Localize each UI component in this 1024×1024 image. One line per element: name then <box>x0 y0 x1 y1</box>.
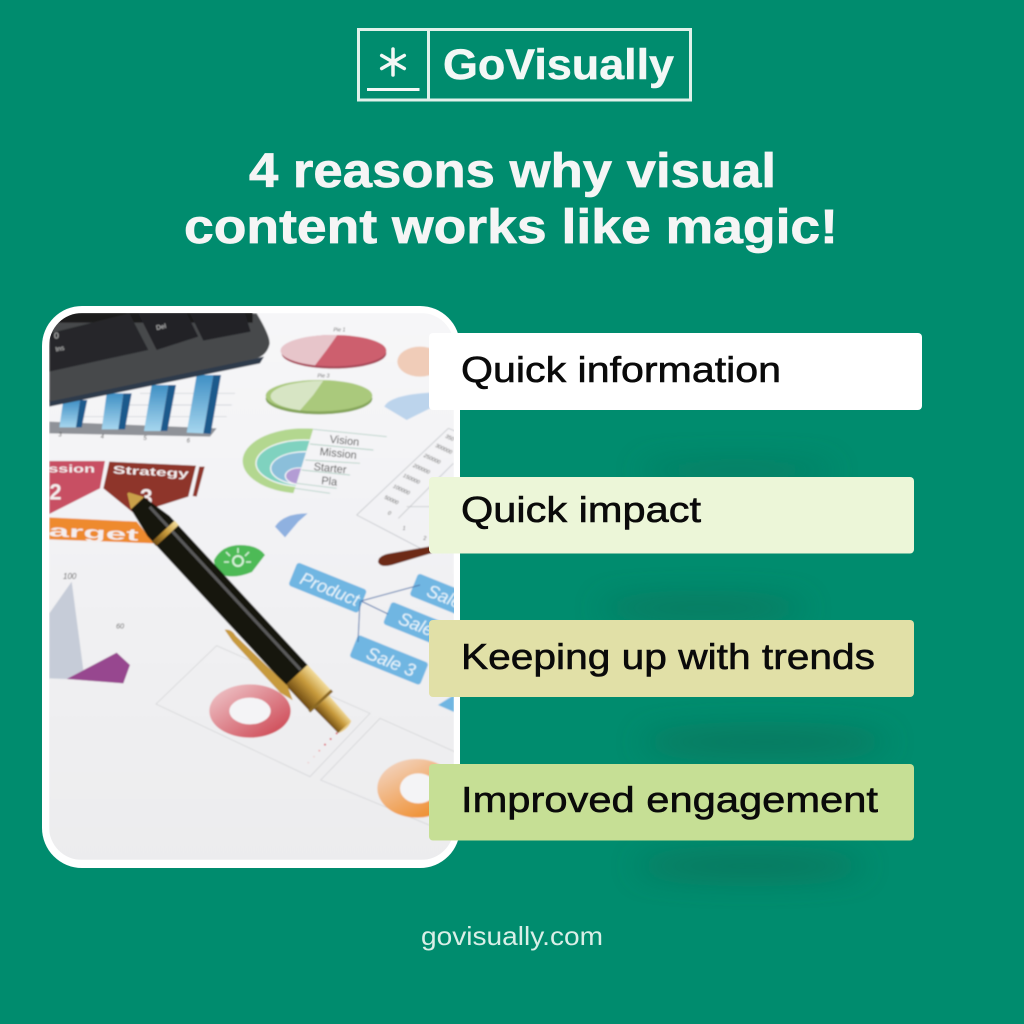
label: quick information <box>429 333 922 410</box>
data table: 250000 <box>422 453 441 466</box>
vision diagram: Mission <box>319 446 357 462</box>
ribbons: mission, strategy, target <box>48 461 205 545</box>
data table: 200000 <box>411 463 431 476</box>
data table: 300000 <box>434 443 453 456</box>
pie charts: Pie 3 <box>317 373 330 379</box>
data table: 0 <box>386 510 392 517</box>
label: keeping up with trends: Keeping up with trends <box>461 636 875 677</box>
soft shadows <box>598 464 890 877</box>
label: quick impact <box>429 477 914 554</box>
bar chart: 3 <box>58 433 62 439</box>
data table: 100000 <box>392 484 411 497</box>
label: quick impact: Quick impact <box>461 489 701 530</box>
ribbons: mission, strategy, target: Strategy <box>113 464 191 480</box>
vision diagram <box>243 428 387 537</box>
flow boxes: Sale <box>396 608 437 640</box>
bar chart: 5 <box>143 436 147 442</box>
footer url: govisually.com <box>421 921 603 951</box>
area chart fragment: 60 <box>116 622 125 631</box>
data table: 150000 <box>402 473 421 486</box>
donut chart boxes <box>156 646 454 826</box>
ribbons: mission, strategy, target: ssion <box>48 464 95 476</box>
vision diagram: Pla <box>321 475 339 489</box>
flow boxes <box>288 562 454 712</box>
keyboard <box>49 313 270 407</box>
area chart fragment <box>49 582 130 683</box>
logo: GoVisually <box>443 41 674 89</box>
label: quick information: Quick information <box>461 349 781 390</box>
label: improved engagement: Improved engagement <box>461 779 878 820</box>
flow boxes: Sale 3 <box>364 643 418 681</box>
vision diagram: Vision <box>329 434 360 449</box>
data table <box>357 428 457 553</box>
keyboard: Ins <box>55 345 66 354</box>
icon: green bulb badge <box>214 545 265 576</box>
flow boxes: Sale <box>424 581 465 613</box>
pie charts: Pie 1 <box>333 328 346 334</box>
title <box>184 145 838 254</box>
title: content works like magic! <box>184 201 838 254</box>
glasses <box>378 546 432 566</box>
pen <box>126 492 352 734</box>
data table: 50000 <box>383 495 399 506</box>
axis label: 100 <box>63 572 77 581</box>
ribbons: mission, strategy, target: arget <box>48 521 140 545</box>
bar chart <box>49 375 235 445</box>
keyboard: 0 <box>54 330 59 340</box>
data table: 2 <box>422 536 426 542</box>
data table: 1 <box>403 526 406 532</box>
ribbons: mission, strategy, target: 2 <box>49 479 62 504</box>
flow boxes: Product <box>297 568 363 610</box>
bar chart: 6 <box>187 439 191 445</box>
data table: 350 <box>444 434 455 443</box>
label: keeping up with trends <box>429 620 914 697</box>
keyboard: Del <box>156 323 167 332</box>
logo <box>358 30 690 100</box>
title: 4 reasons why visual <box>249 145 776 198</box>
label: improved engagement <box>429 764 914 840</box>
panel: photo of charts on a desk <box>42 306 474 868</box>
bar chart: 4 <box>101 435 105 441</box>
ribbons: mission, strategy, target: 3 <box>140 484 153 510</box>
vision diagram: Starter <box>313 461 347 476</box>
pie charts <box>266 328 443 420</box>
